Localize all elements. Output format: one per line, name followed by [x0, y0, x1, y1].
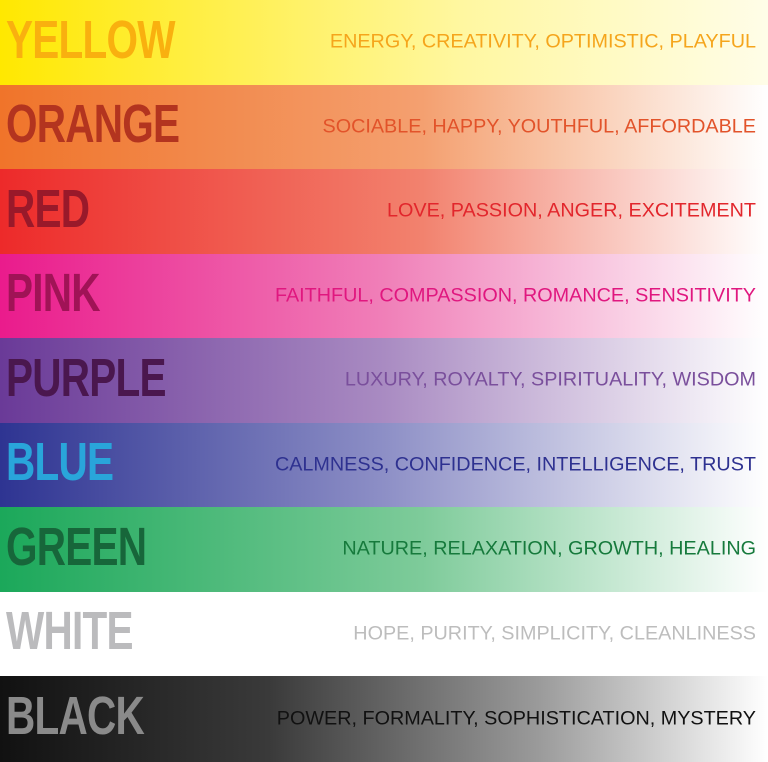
row: pink: [0, 254, 768, 338]
text: purple meanings: LUXURY, ROYALTY, SPIRITUALITY, WISDOM: [345, 369, 756, 391]
text: red meanings: LOVE, PASSION, ANGER, EXCITEMENT: [387, 200, 756, 222]
text: white meanings: HOPE, PURITY, SIMPLICITY, CLEANLINESS: [353, 622, 756, 644]
label: orange: ORANGE: [6, 94, 179, 154]
label: green: GREEN: [6, 517, 146, 577]
label: white: WHITE: [6, 601, 133, 661]
row: white: [0, 592, 768, 676]
label: yellow: YELLOW: [6, 10, 175, 70]
label: pink: PINK: [6, 263, 100, 323]
text: blue meanings: CALMNESS, CONFIDENCE, INTELLIGENCE, TRUST: [275, 453, 756, 475]
row: black: [0, 676, 768, 762]
row: green: [0, 507, 768, 592]
label: blue: BLUE: [6, 432, 113, 492]
text: pink meanings: FAITHFUL, COMPASSION, ROMANCE, SENSITIVITY: [275, 284, 756, 306]
text: yellow meanings: ENERGY, CREATIVITY, OPTIMISTIC, PLAYFUL: [330, 31, 756, 53]
label: purple: PURPLE: [6, 348, 166, 408]
row: orange: [0, 84, 768, 169]
row: blue: [0, 422, 768, 507]
row: yellow: [0, 0, 768, 84]
label: red: RED: [6, 179, 89, 239]
row: red: [0, 169, 768, 254]
label: black: BLACK: [6, 686, 144, 746]
row: purple: [0, 338, 768, 422]
text: black meanings: POWER, FORMALITY, SOPHISTICATION, MYSTERY: [277, 708, 756, 730]
text: orange meanings: SOCIABLE, HAPPY, YOUTHFUL, AFFORDABLE: [322, 115, 756, 137]
text: green meanings: NATURE, RELAXATION, GROWTH, HEALING: [342, 538, 756, 560]
